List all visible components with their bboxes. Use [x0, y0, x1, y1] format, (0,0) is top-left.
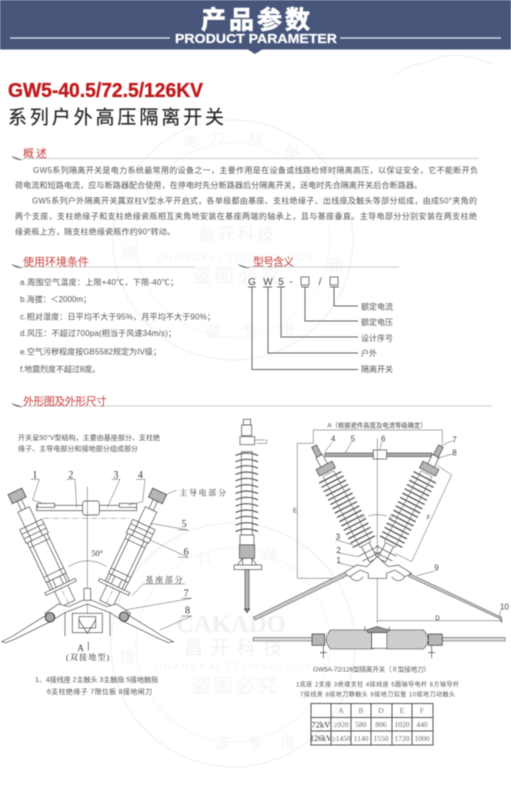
- watermark: upper seal: 盗 专 用: [205, 323, 295, 341]
- environment list: d.风压：不超过700pa(相当于风速34m/s)；: [20, 328, 176, 338]
- watermark: upper seal: 盗图必究: [192, 265, 280, 287]
- part numbers: 2: [336, 546, 341, 555]
- intro text for left drawing: 缘子、主导电部分和接地部分组成部分: [18, 444, 138, 453]
- table row 126kV: 1000: [414, 734, 430, 743]
- table header row: F: [420, 706, 424, 715]
- part numbers: 3: [336, 533, 341, 542]
- dimensions E and F: 20°: [360, 515, 366, 520]
- part numbers and leaders: 6: [184, 547, 189, 558]
- model code: G: [248, 277, 256, 288]
- right insulator column: [91, 484, 175, 610]
- table row 72kV: 72kV: [312, 720, 331, 730]
- model labels: 额定电压: [361, 317, 393, 327]
- diagrams: side view and dimensioned front view: [234, 419, 509, 658]
- model leader lines: [248, 287, 358, 370]
- table row 126kV: [310, 734, 430, 743]
- model code: /: [319, 277, 322, 288]
- left insulator column: [0, 484, 83, 610]
- view label: [66, 642, 110, 662]
- watermark: upper seal: [113, 120, 353, 360]
- model code: [248, 277, 338, 288]
- model code: W: [263, 277, 273, 288]
- product title: GW5-40.5/72.5/126KV: [8, 80, 204, 102]
- header title: 产品参数: [201, 6, 310, 34]
- model code: -: [289, 277, 293, 288]
- table row 126kV: 126kV: [310, 734, 332, 743]
- part numbers and leaders: 1: [32, 470, 37, 481]
- header subtitle: PRODUCT PARAMETER: [175, 32, 337, 46]
- overview heading: 概述: [23, 147, 47, 160]
- part numbers and leaders: 主导电部分: [179, 487, 226, 497]
- model labels: 额定电流: [361, 302, 393, 312]
- model labels: 户外: [361, 348, 377, 358]
- watermark: upper seal: 昌开科技: [198, 225, 274, 244]
- environment list: a.周围空气温度：上限+40℃，下限-40℃；: [20, 277, 178, 287]
- part numbers and leaders: 7: [184, 589, 189, 600]
- overview text: GW5系列户外隔离开关属双柱V型水平开启式，各单极都由基座、支柱绝缘子、出线座及触头等部分组成，由成50°夹角的: [32, 196, 477, 206]
- right drawing captions: [296, 664, 459, 698]
- section: environment conditions: [11, 254, 215, 374]
- table row 72kV: 440: [416, 720, 428, 729]
- left drawing caption: 6支柱绝缘子 7限位板 8接地闸刀: [47, 687, 152, 696]
- model labels: [361, 302, 393, 374]
- outline heading: 外形图及外形尺寸: [23, 394, 107, 408]
- environment list: b.海拔：＜2000m；: [20, 294, 91, 304]
- table row 126kV: 1550: [374, 734, 389, 743]
- part numbers and leaders: 8: [185, 605, 190, 616]
- right earth blade: [409, 574, 502, 622]
- conductor bar: [325, 450, 432, 459]
- dimensions E and F: F: [427, 515, 431, 521]
- dimension D: D: [435, 615, 440, 622]
- watermark: lower seal: 力: [194, 549, 213, 570]
- watermark: upper seal: 技: [281, 142, 302, 164]
- table row 126kV: 1140: [354, 734, 369, 743]
- part numbers: 5: [351, 434, 356, 443]
- watermark: lower seal: 盗图必究: [192, 675, 276, 697]
- dimensions E and F: [293, 443, 452, 578]
- watermark: lower seal: 技: [261, 545, 279, 565]
- table row 72kV: [312, 720, 428, 730]
- right shed insulator: [366, 441, 452, 574]
- watermark: lower seal: 昌开科技: [184, 637, 282, 659]
- part numbers: [325, 434, 509, 617]
- left drawing caption: [35, 675, 158, 696]
- part numbers: 7: [452, 435, 457, 444]
- right drawing captions: GW5A-72/126型隔离开关（Ⅱ型接地刀）: [313, 664, 430, 674]
- table row 72kV: 1020: [394, 720, 410, 729]
- model labels: 设计序号: [361, 333, 393, 343]
- overview text: [15, 165, 478, 236]
- table row 72kV: ≥920: [333, 720, 349, 729]
- part numbers: 10: [500, 602, 509, 611]
- part numbers and leaders: 3: [113, 470, 118, 481]
- left drawing caption: 1、4接线座 2主触头 3主触指 5接地触指: [35, 675, 158, 684]
- intro text for left drawing: 开关呈50°V型结构，主要由基座部分、支柱绝: [18, 433, 160, 442]
- watermark: lower seal: [111, 523, 355, 767]
- product subtitle: 系列户外高压隔离开关: [8, 106, 224, 128]
- watermark: upper seal: 电: [181, 132, 201, 154]
- watermark: lower seal: CAKADO: [176, 611, 286, 638]
- base frame: [45, 588, 131, 636]
- diagram: double-earth front view: 50°: [91, 549, 103, 558]
- model labels: 隔离开关: [361, 364, 393, 374]
- right earth blade: [119, 612, 173, 643]
- left earth blade: [253, 572, 347, 620]
- right drawing captions: 7接线夹 8接地刀静触头 9接地刀铝管 10接地刀动触头: [300, 690, 455, 698]
- overview text: 缘瓷瓶上方，随支柱绝缘瓷瓶作约90°转动。: [15, 226, 175, 236]
- part numbers and leaders: 4: [138, 470, 143, 481]
- section: overview: [11, 147, 479, 236]
- watermark: lower seal: 搜: [120, 649, 135, 666]
- part numbers: 1: [336, 556, 341, 565]
- diagram: double-earth front view: [0, 470, 226, 662]
- table header row: E: [400, 706, 405, 715]
- base: [343, 557, 412, 581]
- part numbers: 6: [381, 434, 386, 443]
- environment list: [20, 277, 215, 374]
- dimensions E and F: 20°: [388, 515, 395, 520]
- watermark: upper seal: 搜: [122, 245, 137, 262]
- dimension A: [313, 421, 442, 443]
- view label: A: [77, 643, 84, 653]
- watermark: lower seal: CHANGKAI TECHNOLOGY: [155, 662, 312, 673]
- decorative sketch top right: [397, 55, 494, 73]
- model heading: 型号含义: [253, 254, 294, 268]
- part numbers and leaders: 2: [68, 470, 73, 481]
- part numbers: 9: [434, 564, 439, 573]
- dimensions E and F: E: [293, 509, 297, 515]
- section: model meaning: [237, 254, 399, 374]
- overview text: 两个支座，支柱绝缘子和支柱绝缘瓷瓶相互夹角地安装在基座两端的轴承上，且与基座垂直。主导电部分分别安装在两支柱绝: [15, 211, 477, 221]
- watermark: upper seal: 科: [246, 131, 264, 151]
- environment list: f.地震烈度不超过8度。: [20, 364, 100, 374]
- model code: 5: [278, 277, 284, 288]
- main conductor bar: [37, 501, 137, 518]
- part numbers and leaders: 基座部分: [145, 575, 183, 585]
- part numbers and leaders: [31, 470, 226, 630]
- side view column: [234, 419, 267, 613]
- environment heading: 使用环境条件: [23, 254, 89, 268]
- watermark: upper seal: 力: [209, 129, 225, 147]
- overview text: GW5系列隔离开关是电力系统最常用的设备之一，主要作用是在设备或线路检修时隔离高压，以保证安全，它不能断开负: [33, 165, 478, 175]
- dimension A: A（根据瓷件高度及电流等级确定）: [327, 421, 427, 430]
- table header row: B: [358, 706, 364, 715]
- part numbers and leaders: 5: [182, 519, 187, 530]
- overview text: 荷电流和短路电流，应与断路器配合使用，在停电时先分断路器后分隔离开关，送电时先合隔离开关后合断路器。: [15, 180, 422, 190]
- part numbers: 8: [452, 449, 457, 458]
- table header row: D: [378, 706, 384, 715]
- table row 126kV: 1720: [394, 734, 410, 743]
- environment list: c.相对湿度：日平均不大于95%，月平均不大于90%；: [20, 312, 215, 322]
- table header row: [338, 706, 424, 715]
- table row 72kV: 806: [375, 720, 387, 729]
- intro text for left drawing: [18, 433, 160, 453]
- left earth blade: [2, 613, 55, 643]
- watermark: upper seal: 删: [328, 257, 343, 274]
- table row 72kV: 580: [355, 720, 367, 729]
- top view: [253, 627, 505, 658]
- header band: [0, 0, 511, 54]
- part numbers: 4: [331, 434, 336, 443]
- left shed insulator: [303, 441, 389, 574]
- section: outline drawing: [11, 394, 492, 408]
- view label: (双接地型): [66, 652, 110, 662]
- right drawing captions: 1底座 2支座 3绝缘支柱 4接线座 5圆轴导电杆 6方轴导杆: [296, 680, 459, 688]
- angle mark: [68, 561, 107, 567]
- watermark: lower seal: 盗 专 用: [215, 735, 295, 752]
- table row 126kV: ≥1450: [332, 734, 351, 743]
- table header row: A: [338, 706, 344, 715]
- environment list: e.空气污秽程度按GB5582规定为IV级；: [20, 346, 161, 356]
- dimension D: [377, 615, 503, 622]
- watermark: upper seal: CHANGKAI TECHNOLOGY: [156, 253, 313, 264]
- dimension table: [310, 704, 433, 745]
